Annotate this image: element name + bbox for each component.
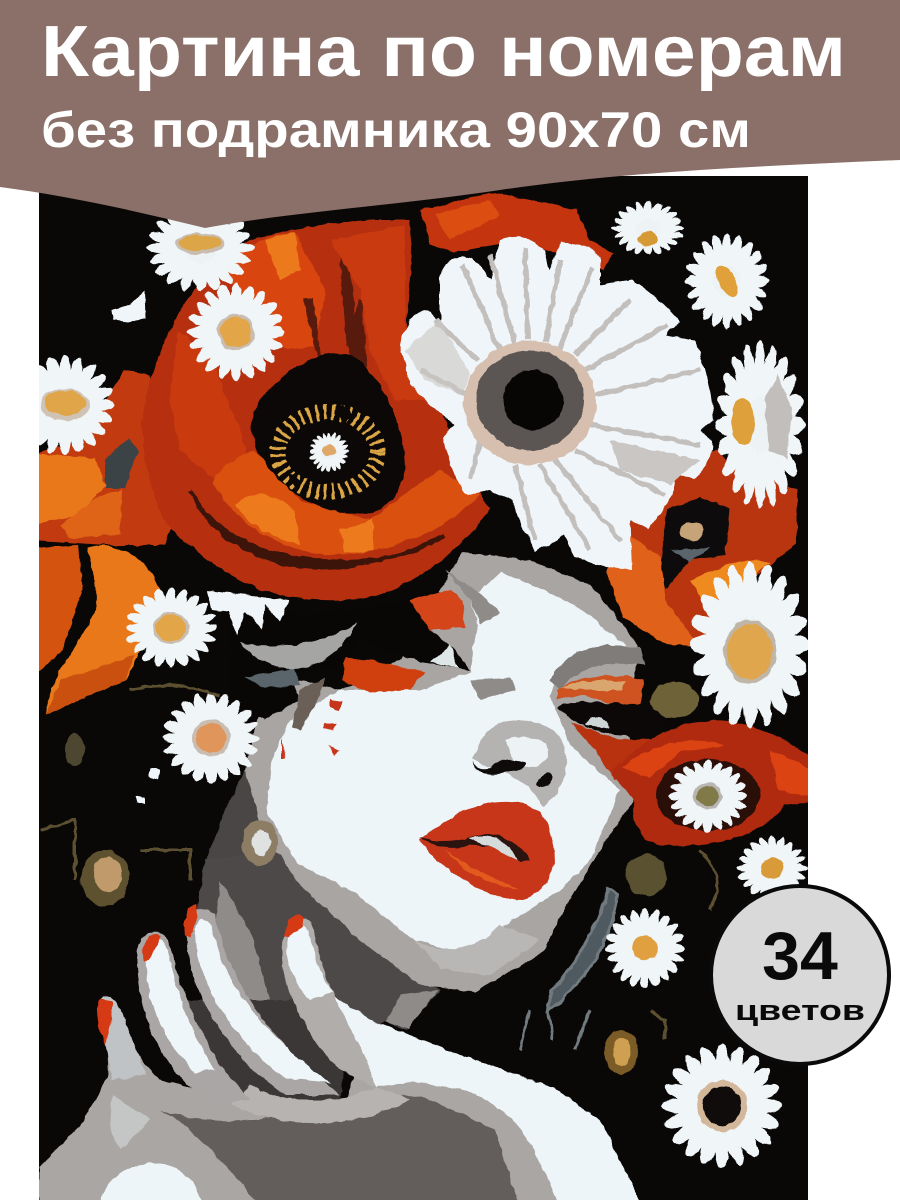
seed pods (65, 682, 699, 1074)
left eye (230, 590, 470, 758)
hair line on forehead (555, 548, 650, 655)
daisy 9 (162, 692, 260, 784)
painting black background (39, 176, 808, 1200)
poppy daisy (668, 760, 748, 832)
lower petal bright (235, 494, 375, 553)
closed lid (240, 623, 357, 668)
eye white (585, 718, 610, 728)
orange petal lower (46, 546, 160, 715)
orange petal mid (60, 490, 122, 538)
poppy dark fold (190, 490, 445, 568)
face grey base (245, 552, 640, 992)
poppy left (30, 370, 175, 715)
brow grey patch (445, 570, 515, 700)
gerbera tan ring (464, 341, 596, 465)
daisy 11 (605, 908, 685, 988)
daisy 1 (146, 204, 254, 292)
arm highlight (335, 997, 660, 1200)
small white bits (135, 768, 160, 805)
poppy right (607, 450, 797, 647)
painting: woman with poppies and daisies (15, 176, 815, 1200)
finger two highlight (145, 939, 215, 1072)
finger three highlight (195, 919, 330, 1082)
finger four (282, 919, 375, 1087)
lash shadow (292, 678, 325, 730)
pod 3 (625, 854, 667, 896)
black eye band (258, 592, 470, 720)
lips (420, 802, 555, 900)
gerbera grey streaks (420, 248, 700, 550)
gerbera (400, 236, 714, 570)
daisy 2 (187, 283, 285, 381)
daisy 12 (662, 1044, 782, 1168)
poppy white centre (309, 432, 349, 472)
pod 4 light (613, 1038, 631, 1066)
gerbera black centre (503, 370, 563, 430)
lid dark strand (245, 668, 300, 688)
daisy 5 (612, 201, 684, 255)
poppy dark interior (656, 759, 760, 831)
daisy 8 (125, 588, 217, 668)
stamen ring (278, 412, 378, 492)
lips red (420, 802, 555, 900)
base petals (142, 220, 489, 600)
poppy centre seed (680, 522, 704, 540)
top petal orange (222, 232, 325, 350)
lower lip highlight (445, 850, 520, 890)
eye black (558, 680, 665, 745)
dark petals (30, 370, 175, 545)
mouth line (420, 834, 530, 862)
eye white (430, 645, 458, 668)
gerbera lower shade (610, 440, 700, 485)
pod 2 light (252, 830, 270, 856)
small white fragment (112, 290, 146, 322)
badge number: 34 (762, 918, 838, 994)
pod 5 (651, 682, 699, 718)
nose shading (473, 720, 566, 807)
pod 1 (81, 850, 129, 906)
shoulder light patch (110, 1095, 150, 1150)
shoulder highlight (100, 1162, 202, 1200)
stamen gaps (285, 405, 352, 486)
finger gap shadow (188, 999, 344, 1100)
chin shadow (414, 925, 540, 975)
finger two (137, 932, 250, 1105)
top stripes (265, 232, 300, 280)
hand mid shading (230, 1085, 410, 1123)
badge label: цветов (735, 995, 865, 1027)
pod 1 light (94, 856, 122, 892)
gerbera petal shade left (405, 320, 470, 395)
poppy highlight (622, 741, 815, 798)
red shadow below eye (342, 657, 425, 693)
orange petal left (607, 530, 700, 647)
top petal right (330, 225, 430, 400)
gerbera dark ring (476, 350, 584, 450)
neck (195, 850, 440, 1040)
nostrils (473, 760, 553, 786)
pod 6 (65, 734, 85, 766)
daisy under poppy fragment (206, 590, 289, 635)
drips (282, 700, 342, 758)
header banner (0, 0, 900, 228)
poppy grey shade (672, 548, 710, 562)
finger three (187, 909, 340, 1095)
daisy 7 (690, 561, 810, 729)
hair strands (520, 888, 618, 1050)
face (245, 552, 640, 992)
hand dark shading (160, 1095, 530, 1200)
orange petal lower (690, 560, 770, 605)
poppy petals (610, 720, 815, 846)
pod 2 (242, 820, 278, 866)
red shadow above eye (410, 590, 465, 630)
daisy 3 (15, 355, 115, 455)
daisy 10 (737, 836, 807, 900)
right eye (550, 644, 650, 780)
eyelid orange (557, 676, 643, 712)
title: Картина по номерам (41, 12, 846, 92)
finger four highlight (287, 925, 332, 1000)
neck side shadow (206, 769, 259, 859)
teeth (470, 836, 517, 860)
nose highlight (505, 737, 550, 768)
eye socket grey arch (550, 645, 645, 690)
top poppy highlight (435, 200, 500, 240)
poppy black centre (251, 353, 406, 514)
poppy lower right (610, 720, 815, 846)
pod 4 (604, 1030, 638, 1074)
poppy dark centre (660, 497, 730, 590)
badge: 34 colours (711, 886, 889, 1064)
stems (40, 686, 717, 1040)
top poppy (420, 193, 613, 270)
orange petal upper (30, 453, 105, 525)
left petal (170, 330, 255, 490)
finger one (100, 996, 145, 1080)
lower petal light (212, 450, 480, 555)
badge circle (711, 886, 889, 1064)
red under eye (570, 722, 650, 780)
poppy base (607, 450, 797, 647)
petal fold dark (305, 240, 366, 365)
face white area (267, 572, 625, 955)
big poppy (142, 193, 613, 600)
daisy 6 (715, 341, 805, 509)
daisies (15, 201, 810, 1168)
grey smudge (105, 438, 138, 488)
arm and hand base (39, 1020, 660, 1200)
subtitle: без подрамника 90х70 см (41, 102, 751, 158)
orange petal edge (30, 545, 82, 680)
red nails (97, 905, 303, 1045)
neck light (215, 880, 438, 1028)
daisy 4 (685, 233, 769, 329)
eyelid tan (560, 681, 625, 690)
gerbera outline (400, 236, 714, 570)
orange lower tip (46, 655, 135, 715)
